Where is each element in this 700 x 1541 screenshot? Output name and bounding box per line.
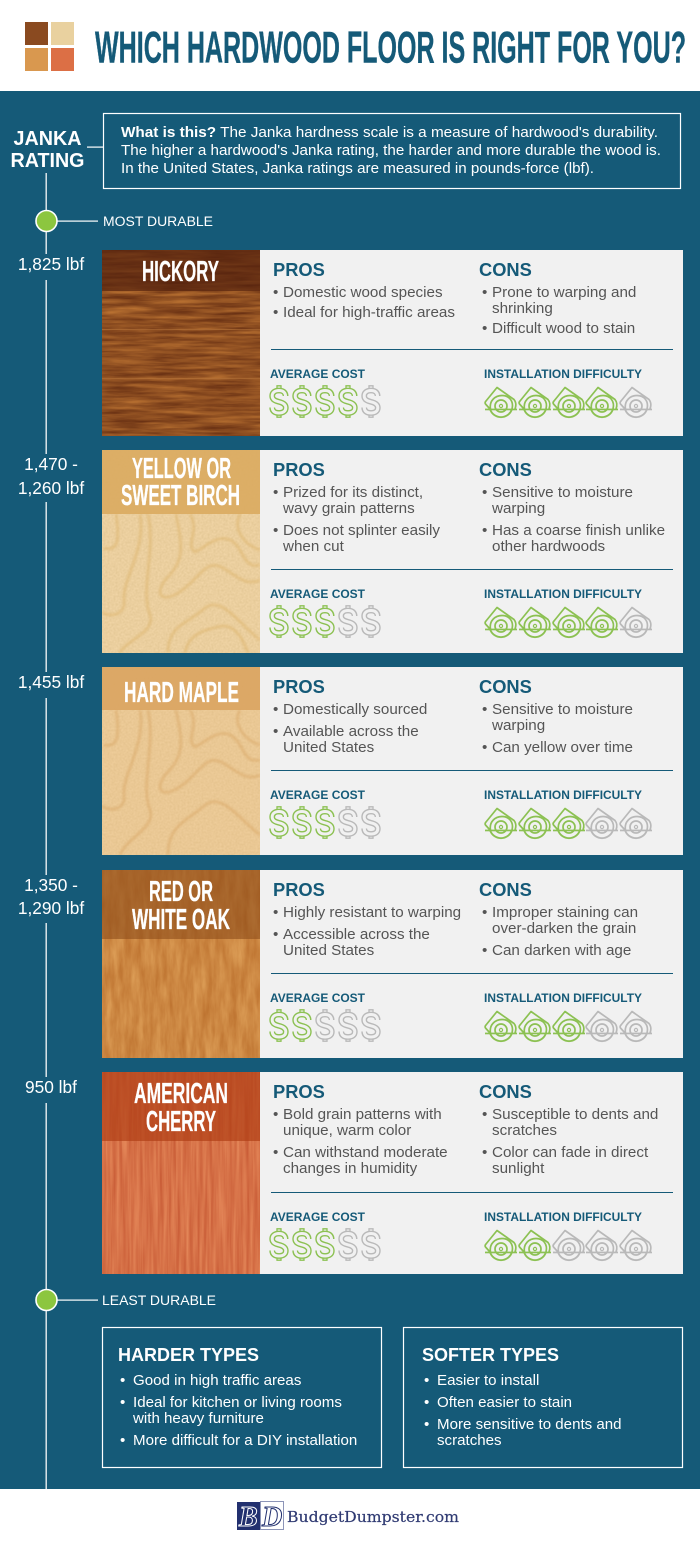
panel: softer types: Often easier to stain <box>437 1394 572 1411</box>
janka value: birch: 1,470 - <box>24 454 78 474</box>
janka value: maple: 1,455 lbf <box>18 672 84 692</box>
janka value: oak: 1,350 - <box>24 875 78 895</box>
cons: hickory: • <box>482 284 487 301</box>
pros: maple: • <box>273 723 278 740</box>
marker: most durable <box>36 210 213 232</box>
panel: harder types: More difficult for a DIY installation <box>133 1432 357 1449</box>
name: cherry: CHERRY <box>146 1106 216 1138</box>
cons: cherry: • <box>482 1106 487 1123</box>
pros: oak: Highly resistant to warping <box>283 904 461 921</box>
panel: softer types <box>404 1328 682 1468</box>
pros: birch: • <box>273 484 278 501</box>
cons: hickory: • <box>482 320 487 337</box>
panel: harder types: Ideal for kitchen or living rooms <box>133 1394 342 1411</box>
installation difficulty: cherry: INSTALLATION DIFFICULTY <box>484 1210 642 1224</box>
logo: BudgetDumpster: BudgetDumpster.com <box>287 1508 459 1526</box>
average cost: maple: AVERAGE COST <box>270 788 366 802</box>
cons: oak <box>479 879 638 959</box>
cons: hickory: CONS <box>479 259 532 280</box>
header <box>0 0 700 91</box>
pros: oak: Accessible across the <box>283 926 430 943</box>
cons: oak: • <box>482 942 487 959</box>
cons: hickory: shrinking <box>492 300 553 317</box>
panel: maple <box>18 667 683 855</box>
cons: birch: • <box>482 522 487 539</box>
callout: what is this <box>104 114 680 188</box>
cons: hickory <box>479 259 636 337</box>
timeline axis <box>10 173 88 1489</box>
average cost: birch: AVERAGE COST <box>270 587 366 601</box>
pros: hickory: • <box>273 284 278 301</box>
pros: cherry: unique, warm color <box>283 1122 411 1139</box>
panel: softer types: SOFTER TYPES <box>422 1345 559 1365</box>
pros: hickory <box>273 259 455 321</box>
cons: cherry: Susceptible to dents and <box>492 1106 658 1123</box>
name: oak: RED OR <box>149 876 213 908</box>
cons: birch: warping <box>491 500 545 517</box>
pros: birch: • <box>273 522 278 539</box>
wood image: oak <box>102 870 260 1058</box>
pros: oak: • <box>273 904 278 921</box>
logo: BudgetDumpster: D <box>261 1502 282 1533</box>
panel: birch <box>18 450 683 653</box>
average cost: cherry <box>270 1210 378 1260</box>
installation difficulty: birch <box>484 587 652 637</box>
installation difficulty: birch: INSTALLATION DIFFICULTY <box>484 587 642 601</box>
installation difficulty: hickory: INSTALLATION DIFFICULTY <box>484 367 642 381</box>
pros: maple: • <box>273 701 278 718</box>
marker: least durable <box>36 1290 216 1310</box>
panel: harder types: HARDER TYPES <box>118 1345 259 1365</box>
callout: what is this: In the United States, Janka ratings are measured in pounds-force (lbf). <box>121 160 594 177</box>
name: oak: WHITE OAK <box>132 904 230 936</box>
cons: maple: • <box>482 739 487 756</box>
cons: cherry: scratches <box>492 1122 557 1139</box>
cons: birch: Sensitive to moisture <box>492 484 633 501</box>
average cost: oak: AVERAGE COST <box>270 991 366 1005</box>
pros: hickory: PROS <box>273 259 325 280</box>
cons: birch <box>479 459 665 555</box>
panel: softer types: scratches <box>437 1432 502 1449</box>
pros: cherry: • <box>273 1106 278 1123</box>
panel: harder types: • <box>120 1372 125 1389</box>
pros: birch <box>273 459 440 555</box>
callout: what is this: The higher a hardwood's Janka rating, the harder and more durable the wood is. <box>121 142 661 159</box>
name: birch: SWEET BIRCH <box>121 480 240 512</box>
cons: maple: Can yellow over time <box>492 739 633 756</box>
janka value: birch <box>18 454 84 498</box>
wood image: cherry <box>102 1072 260 1274</box>
icon: wood swatches <box>25 22 74 71</box>
pros: hickory: Domestic wood species <box>283 284 443 301</box>
cons: cherry: sunlight <box>492 1160 545 1177</box>
pros: birch: wavy grain patterns <box>282 500 415 517</box>
cons: cherry: Color can fade in direct <box>492 1144 649 1161</box>
pros: maple: Available across the <box>283 723 419 740</box>
wood image: hickory <box>102 250 260 436</box>
heading: Janka rating <box>10 128 103 172</box>
panel: softer types: • <box>424 1416 429 1433</box>
janka value: cherry: 950 lbf <box>25 1077 77 1097</box>
name: birch <box>121 453 240 512</box>
pros: oak: • <box>273 926 278 943</box>
janka value: oak <box>18 875 84 918</box>
installation difficulty: maple <box>484 788 652 838</box>
name: hickory: HICKORY <box>142 256 219 288</box>
panel: harder types: • <box>120 1394 125 1411</box>
panel: cherry <box>25 1072 683 1274</box>
pros: maple <box>273 676 427 756</box>
panel: softer types: More sensitive to dents and <box>437 1416 622 1433</box>
average cost: birch <box>270 587 378 637</box>
panel: softer types: Easier to install <box>437 1372 539 1389</box>
cons: oak: • <box>482 904 487 921</box>
pros: maple: United States <box>283 739 375 756</box>
pros: birch: PROS <box>273 459 325 480</box>
cons: oak: over-darken the grain <box>492 920 636 937</box>
pros: cherry <box>273 1081 448 1177</box>
callout: what is this: What is this? The Janka hardness scale is a measure of hardwood's durability. <box>121 124 658 141</box>
janka value: birch: 1,260 lbf <box>18 478 84 498</box>
pros: birch: when cut <box>282 538 345 555</box>
average cost: maple <box>270 788 378 838</box>
pros: oak: United States <box>283 942 375 959</box>
panel: harder types: Good in high traffic areas <box>133 1372 301 1389</box>
pros: cherry: • <box>273 1144 278 1161</box>
name: oak <box>132 876 230 936</box>
panel: harder types: with heavy furniture <box>132 1410 264 1427</box>
heading: Janka rating: RATING <box>10 150 84 172</box>
panel: hickory <box>18 250 683 436</box>
cons: birch: CONS <box>479 459 532 480</box>
pros: oak: PROS <box>273 879 325 900</box>
pros: maple: Domestically sourced <box>283 701 427 718</box>
average cost: hickory <box>270 367 378 417</box>
wood image: birch <box>102 450 260 653</box>
logo: BudgetDumpster: B <box>238 1502 258 1533</box>
installation difficulty: oak <box>484 991 652 1041</box>
logo: BudgetDumpster <box>237 1502 459 1533</box>
panel: softer types: • <box>424 1394 429 1411</box>
pros: cherry: changes in humidity <box>283 1160 418 1177</box>
pros: hickory: Ideal for high-traffic areas <box>283 304 455 321</box>
installation difficulty: maple: INSTALLATION DIFFICULTY <box>484 788 642 802</box>
cons: cherry: • <box>482 1144 487 1161</box>
heading: Janka rating: JANKA <box>14 128 82 150</box>
average cost: oak <box>270 991 378 1041</box>
pros: cherry: PROS <box>273 1081 325 1102</box>
average cost: cherry: AVERAGE COST <box>270 1210 366 1224</box>
panel: harder types: • <box>120 1432 125 1449</box>
installation difficulty: cherry <box>484 1210 652 1260</box>
name: birch: YELLOW OR <box>132 453 231 485</box>
pros: maple: PROS <box>273 676 325 697</box>
cons: oak: Improper staining can <box>492 904 638 921</box>
cons: cherry: CONS <box>479 1081 532 1102</box>
cons: maple: Sensitive to moisture <box>492 701 633 718</box>
cons: hickory: Difficult wood to stain <box>492 320 635 337</box>
installation difficulty: oak: INSTALLATION DIFFICULTY <box>484 991 642 1005</box>
pros: hickory: • <box>273 304 278 321</box>
marker: most durable: MOST DURABLE <box>103 214 213 229</box>
cons: birch: Has a coarse finish unlike <box>492 522 665 539</box>
pros: oak <box>273 879 461 959</box>
panel: harder types <box>102 1328 382 1468</box>
cons: maple: warping <box>491 717 545 734</box>
cons: oak: CONS <box>479 879 532 900</box>
pros: cherry: Can withstand moderate <box>283 1144 448 1161</box>
pros: birch: Does not splinter easily <box>283 522 440 539</box>
cons: maple: • <box>482 701 487 718</box>
installation difficulty: hickory <box>484 367 652 417</box>
cons: cherry <box>479 1081 658 1177</box>
marker: least durable: LEAST DURABLE <box>102 1293 216 1308</box>
panel: oak <box>18 870 683 1058</box>
cons: hickory: Prone to warping and <box>492 284 636 301</box>
cons: birch: other hardwoods <box>492 538 606 555</box>
wood image: maple <box>102 667 260 855</box>
name: cherry: AMERICAN <box>134 1078 228 1110</box>
cons: birch: • <box>482 484 487 501</box>
pros: cherry: Bold grain patterns with <box>283 1106 442 1123</box>
cons: oak: Can darken with age <box>492 942 631 959</box>
panel: softer types: • <box>424 1372 429 1389</box>
name: maple: HARD MAPLE <box>124 677 239 709</box>
janka value: hickory: 1,825 lbf <box>18 254 84 274</box>
average cost: hickory: AVERAGE COST <box>270 367 366 381</box>
janka value: oak: 1,290 lbf <box>18 898 84 918</box>
pros: birch: Prized for its distinct, <box>283 484 423 501</box>
cons: maple <box>479 676 633 756</box>
name: cherry <box>134 1078 228 1138</box>
cons: maple: CONS <box>479 676 532 697</box>
